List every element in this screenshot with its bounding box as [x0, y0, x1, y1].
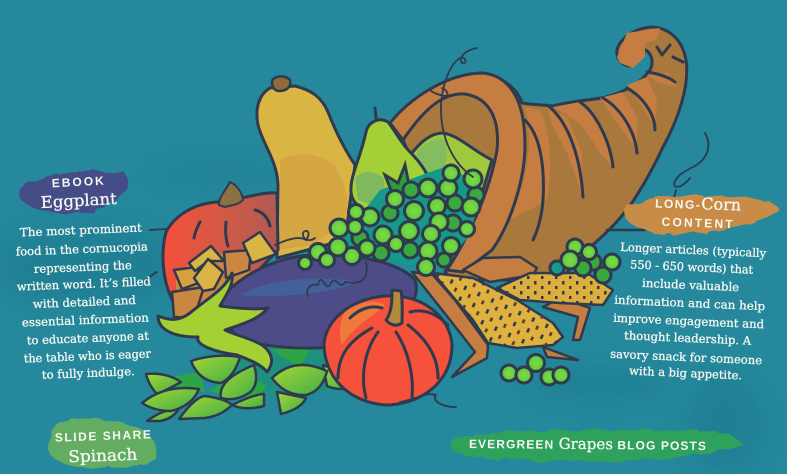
text block: ebook description — [16, 221, 152, 382]
cluster backing — [340, 165, 482, 270]
squash cubes — [172, 232, 276, 318]
label: EBOOK: EBOOK — [51, 174, 104, 190]
text block: ebook description: written word. It’s filled — [17, 274, 152, 294]
text block: long-corn description: 550 - 650 words) that — [630, 257, 754, 277]
heading: long-corn content — [625, 193, 778, 234]
pumpkin shading — [340, 302, 385, 345]
pumpkin ribs — [194, 210, 270, 246]
back pear shade — [410, 139, 447, 190]
brush: grape green — [450, 430, 742, 462]
eggplant leafy cap — [158, 273, 272, 372]
horn rib lines — [525, 45, 683, 240]
label: Eggplant: Eggplant — [40, 189, 118, 212]
heading: slide share spinach — [47, 419, 156, 468]
bottom leaves — [142, 342, 356, 421]
husk right — [543, 298, 590, 340]
front pear — [351, 120, 432, 212]
heading: evergreen grapes blog posts — [450, 430, 742, 462]
label: evergreen grapes blog posts line: EVERGREEN Grapes BLOG POSTS — [469, 434, 707, 454]
text block: ebook description: to fully indulge. — [42, 364, 135, 382]
back pear — [403, 133, 492, 210]
right grape cluster — [550, 239, 620, 283]
eggplant highlight — [240, 278, 358, 296]
pears — [351, 108, 492, 212]
pumpkin stem — [386, 290, 402, 325]
background shadow washes — [0, 165, 765, 474]
curling vines — [145, 48, 708, 407]
husk left — [412, 272, 488, 377]
brush: purple — [20, 171, 128, 213]
text block: long-corn description: improve engagement and — [613, 311, 765, 331]
front corn kernels — [433, 273, 563, 348]
front pear shade — [355, 172, 385, 205]
text block: long-corn description: thought leadership. A — [624, 328, 752, 348]
label: CONTENT: CONTENT — [661, 215, 734, 231]
red back pumpkin — [163, 182, 278, 305]
brush: orange — [625, 195, 778, 234]
label: SLIDE SHARE: SLIDE SHARE — [55, 427, 151, 445]
label: Spinach: Spinach — [68, 445, 138, 466]
horn highlight stripes — [505, 28, 677, 222]
grape leaf — [385, 165, 410, 200]
husk bottom — [543, 347, 578, 360]
text block: long-corn description: include valuable — [642, 276, 740, 294]
text block: long-corn description: information and can help — [614, 293, 765, 313]
squash stem — [272, 76, 290, 91]
text block: ebook description: with detailed and — [33, 293, 137, 311]
horn rim band — [390, 73, 525, 272]
squash shading — [278, 155, 348, 250]
text block: ebook description: the table who is eager — [24, 346, 152, 366]
text block: ebook description: to educate anyone at — [27, 329, 149, 347]
pumpkin stem — [219, 182, 243, 207]
pumpkin ribs — [338, 307, 448, 398]
loose peas — [501, 354, 569, 385]
squash body — [257, 86, 355, 258]
text block: long-corn description: savory snack for someone — [610, 347, 763, 367]
back corn cob — [497, 273, 613, 305]
text block: long-corn description: with a big appetite. — [629, 364, 742, 382]
text block: long-corn description: Longer articles (typically — [620, 240, 767, 260]
text block: ebook description: The most prominent — [20, 221, 142, 239]
corn husks and cobs — [412, 257, 613, 377]
text block: ebook description: representing the — [34, 258, 132, 276]
heading: ebook eggplant — [20, 171, 128, 213]
text block: ebook description: food in the cornucopia — [16, 239, 148, 259]
grape cluster — [298, 165, 484, 276]
text block: long-corn description — [610, 240, 767, 382]
cornucopia horn — [390, 27, 687, 280]
horn body — [390, 27, 687, 280]
label: LONG-Corn: LONG-Corn — [655, 193, 741, 214]
brush: green — [47, 419, 156, 468]
front orange pumpkin — [324, 290, 452, 405]
text block: ebook description: essential information — [22, 310, 150, 330]
back corn kernels — [497, 273, 613, 305]
husk top — [463, 257, 537, 282]
front corn cob — [433, 273, 563, 348]
pear stem — [375, 108, 376, 118]
butternut squash — [257, 76, 355, 258]
eggplant — [220, 254, 416, 348]
